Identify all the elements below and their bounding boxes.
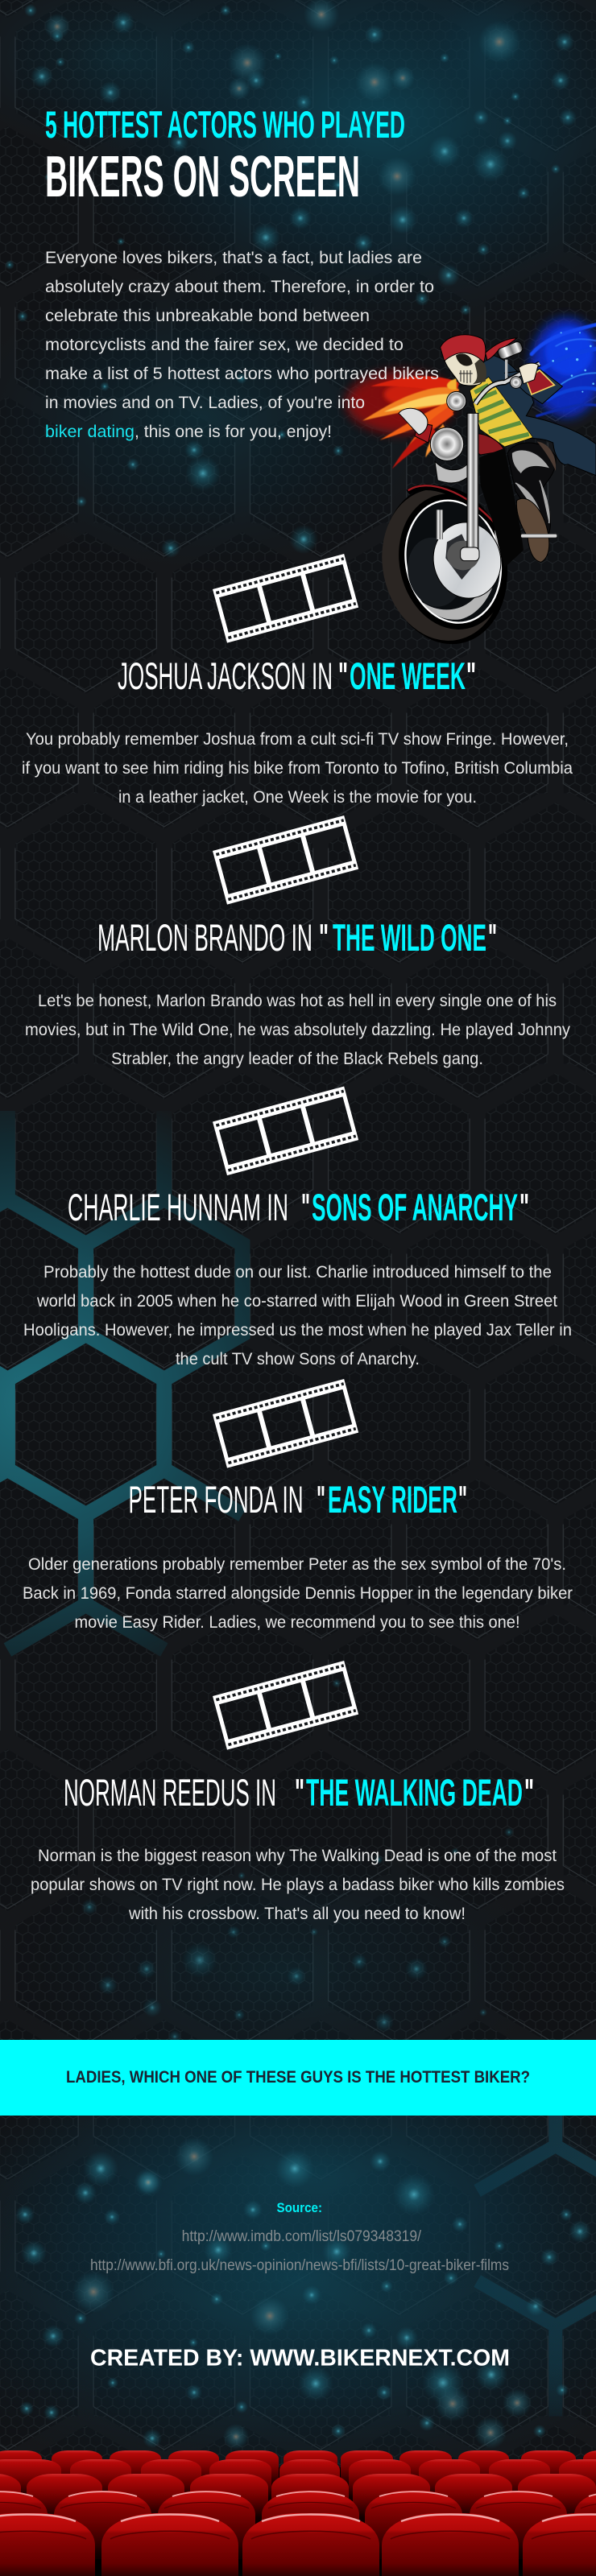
text: Norman Reedus [31,1846,565,1923]
sources [90,2200,509,2274]
text: Charlie Hunnam: Probably the hottest dude on our list. Charlie introduced himself to the [43,1262,552,1282]
red bandana [441,335,517,362]
intro paragraph: make a list of 5 hottest actors who portrayed bikers [45,364,439,383]
heading: Charlie Hunnam: " [301,1186,310,1228]
heading: Joshua Jackson: " [466,654,476,697]
heading: Norman Reedus: NORMAN REEDUS IN [64,1771,276,1814]
headlight [430,427,464,460]
text: Joshua Jackson [22,729,573,807]
coat [483,356,596,476]
front fender [408,485,501,531]
sources: http://www.imdb.com/list/ls079348319/ [182,2228,422,2245]
engine chrome [435,461,467,483]
icon: film strip 5 [213,1661,358,1750]
text: Charlie Hunnam: the cult TV show Sons of Anarchy. [176,1349,420,1368]
section 1: Joshua Jackson [22,654,573,807]
icon: film strip 4 [213,1379,358,1468]
text: Marlon Brando: movies, but in The Wild One, he was absolutely dazzling. He played Johnny [25,1020,570,1039]
intro paragraph: Everyone loves bikers, that's a fact, but ladies are [45,248,422,267]
section 4: Peter Fonda: " [458,1478,467,1521]
cinema seats [0,2450,596,2576]
text: Peter Fonda: Older generations probably remember Peter as the sex symbol of the 70's. [28,1554,566,1574]
right glove [519,363,538,384]
front tyre [368,474,522,656]
heading: Peter Fonda: " [317,1478,325,1521]
seat row 1 [0,2450,596,2499]
text: Norman Reedus: Norman is the biggest reason why The Walking Dead is one of the most [38,1846,557,1865]
seat row 2 [0,2459,596,2512]
seat row 3 [0,2474,596,2534]
striped shirt [470,377,533,447]
heading: Charlie Hunnam: CHARLIE HUNNAM IN [68,1186,288,1228]
background: lower starfield nebula [0,1678,596,2496]
callout banner [0,2040,596,2116]
heading: Norman Reedus: " [295,1771,304,1814]
leg [507,441,556,537]
heading: Peter Fonda: PETER FONDA IN [129,1478,303,1521]
heading: Joshua Jackson: JOSHUA JACKSON IN [118,654,333,697]
seat row 5 [0,2513,596,2576]
heading: Marlon Brando: " [319,916,329,959]
text: Joshua Jackson: in a leather jacket, One Week is the movie for you. [118,787,477,807]
mirror [497,341,524,380]
text: Joshua Jackson: if you want to see him riding his bike from Toronto to Tofino, British Columbia [22,758,573,778]
intro paragraph [45,248,439,441]
fork tubes [437,413,479,561]
heading: Peter Fonda: EASY RIDER [328,1478,457,1521]
text: Norman Reedus: with his crossbow. That's all you need to know! [128,1904,466,1923]
section 3: Charlie Hunnam [23,1186,572,1368]
heading: Norman Reedus: " [524,1771,534,1814]
section 5: Norman Reedus [31,1771,565,1923]
intro paragraph: absolutely crazy about them. Therefore, in order to [45,277,434,296]
intro paragraph: biker dating [45,422,135,441]
heading: Marlon Brando: MARLON BRANDO IN [97,916,312,959]
heading: Charlie Hunnam: " [519,1186,529,1228]
text: Marlon Brando [25,991,570,1068]
section 2: Marlon Brando [25,916,570,1068]
text: Marlon Brando: Strabler, the angry leader of the Black Rebels gang. [111,1049,483,1068]
left glove and cuff [399,408,433,443]
blue flame wing [530,318,596,417]
intro paragraph: celebrate this unbreakable bond between [45,306,370,325]
section 4: Peter Fonda [23,1478,573,1632]
text: Norman Reedus: popular shows on TV right now. He plays a badass biker who kills zombies [31,1875,565,1894]
boot [516,498,549,562]
title [45,103,405,209]
background: teal glowing hexagons [0,1111,596,2417]
text: Peter Fonda: Back in 1969, Fonda starred alongside Dennis Hopper in the legendary biker [23,1583,573,1603]
handlebars [475,364,540,404]
engine block [479,448,524,568]
skull [445,351,486,386]
coat sleeve and cuff [505,369,562,404]
callout banner: LADIES, WHICH ONE OF THESE GUYS IS THE HOTTEST BIKER? [66,2068,530,2087]
text: Charlie Hunnam: world back in 2005 when he co-starred with Elijah Wood in Green Street [36,1291,557,1311]
icon: film strip 3 [213,1086,358,1175]
text: Peter Fonda [23,1554,573,1632]
text: Peter Fonda: movie Easy Rider. Ladies, we recommend you to see this one! [74,1612,520,1632]
intro paragraph: motorcyclists and the fairer sex, we decided to [45,335,404,354]
credit line: CREATED BY: WWW.BIKERNEXT.COM [90,2346,510,2372]
intro paragraph: , this one is for you, enjoy! [135,422,332,441]
sources: Source: [277,2200,322,2215]
heading: Joshua Jackson: " [338,654,348,697]
red and orange flame wing [346,372,459,469]
sources: http://www.bfi.org.uk/news-opinion/news-bfi/lists/10-great-biker-films [90,2257,509,2274]
gauge [447,391,466,411]
illustration: skeleton biker with flames [346,318,596,656]
text: Marlon Brando: Let's be honest, Marlon Brando was hot as hell in every single one of his [38,991,557,1010]
fuel tank [470,434,505,455]
icon: film strip 1 [213,554,358,643]
section 2: Marlon Brando: " [488,916,497,959]
intro paragraph: in movies and on TV. Ladies, of you're into [45,393,365,412]
background: top starfield nebula [0,0,596,572]
foot peg [521,534,557,538]
seat row 4 [0,2491,596,2559]
text: Charlie Hunnam: Hooligans. However, he impressed us the most when he played Jax Teller in [23,1320,572,1340]
icon: film strip 2 [213,815,358,905]
text: Charlie Hunnam [23,1262,572,1368]
text: Joshua Jackson: You probably remember Joshua from a cult sci-fi TV show Fringe. However, [26,729,569,749]
heading: Joshua Jackson: ONE WEEK [350,654,466,697]
